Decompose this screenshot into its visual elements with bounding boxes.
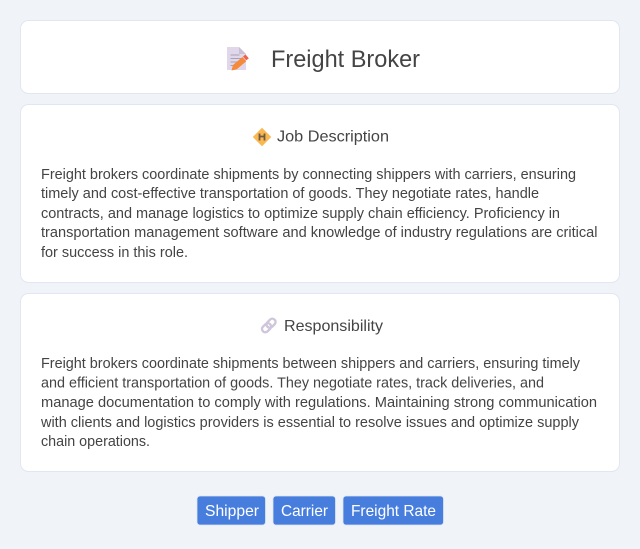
panel: title	[20, 20, 620, 94]
tag: Freight Rate: Freight Rate	[351, 503, 436, 520]
text block: responsibility body: chain operations.	[41, 434, 150, 450]
tags	[197, 496, 444, 525]
text block: responsibility body: manage documentation to comply with regulations. Maintaining strong communication	[41, 395, 597, 411]
icon: road sign diamond	[254, 128, 270, 146]
icon: document with pencil	[227, 47, 249, 70]
panel: job description	[20, 104, 620, 282]
heading: Job Description: Job Description	[277, 128, 389, 146]
heading: Freight Broker: Freight Broker	[271, 46, 420, 73]
text block: responsibility body: and efficient transportation of goods. They negotiate rates, track deliveries, and	[41, 376, 544, 392]
tag: Shipper: Shipper	[205, 503, 260, 520]
text block: job description body: Freight brokers coordinate shipments by connecting shippers with carriers, ensuring	[41, 167, 576, 183]
text block: responsibility body	[40, 356, 597, 450]
icon: chain link	[261, 317, 277, 334]
heading: Responsibility: Responsibility	[284, 318, 383, 335]
text block: job description body: for success in this role.	[41, 245, 188, 261]
panel: responsibility	[20, 294, 620, 472]
tag: Carrier: Carrier	[281, 503, 329, 520]
tag: Freight Rate	[343, 496, 444, 525]
text block: responsibility body: with clients and logistics providers is essential to resolve issues and optimize supply	[40, 415, 580, 431]
text block: responsibility body: Freight brokers coordinate shipments between shippers and carriers, ensuring timely	[41, 356, 581, 372]
text block: job description body	[41, 167, 598, 261]
text block: job description body: transportation management software and knowledge of industry regulations are critical	[41, 225, 598, 241]
tag: Shipper	[197, 496, 266, 525]
text block: job description body: timely and cost-effective transportation of goods. They negotiate rates, handle	[41, 186, 539, 202]
tag: Carrier	[273, 496, 336, 525]
text block: job description body: contracts, and manage logistics to optimize supply chain efficiency. Proficiency in	[41, 206, 560, 222]
